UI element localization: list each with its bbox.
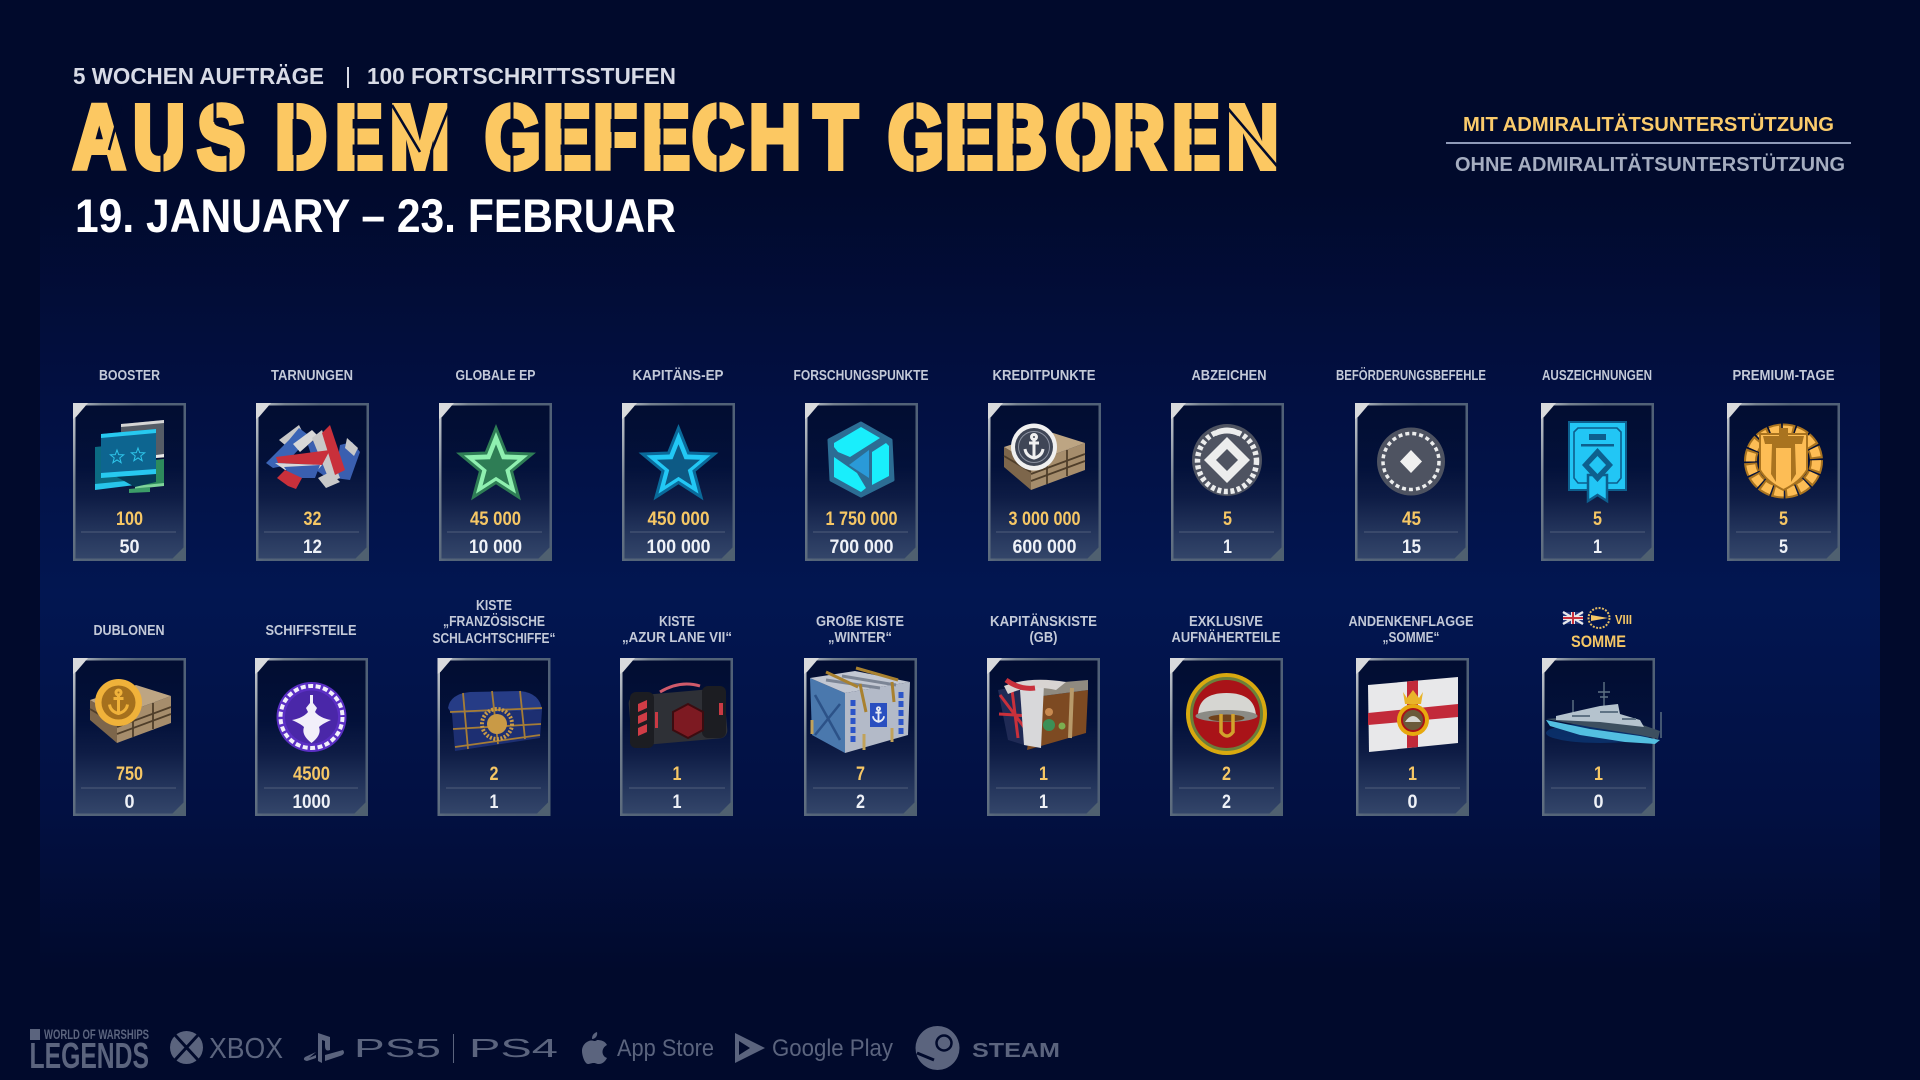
card: Große Kiste Winter: 2 xyxy=(856,792,865,813)
card: Kapitänskiste GB: 1 xyxy=(1039,792,1048,813)
icon: camouflage xyxy=(266,425,360,489)
icon: doubloons crate and coin xyxy=(90,679,171,743)
card: Exklusive Aufnäherteile: 2 xyxy=(1222,792,1231,813)
card: Booster xyxy=(73,368,186,561)
card: Premium-Tage: 5 xyxy=(1779,509,1788,530)
card: Kreditpunkte: KREDITPUNKTE xyxy=(992,368,1096,384)
logo: Steam: STEAM xyxy=(972,1040,1060,1062)
card: Somme ship: 0 xyxy=(1594,792,1604,813)
card: Beförderungsbefehle xyxy=(1336,367,1486,561)
icon: UK flag xyxy=(1563,612,1583,624)
card: Booster: BOOSTER xyxy=(99,368,160,384)
card: Kapitänskiste GB: KAPITÄNSKISTE xyxy=(990,613,1097,630)
card: Beförderungsbefehle: 45 xyxy=(1402,509,1421,530)
card: Kiste Azur Lane VII: KISTE xyxy=(659,614,695,630)
card: Andenkenflagge Somme xyxy=(1348,614,1474,816)
card: Abzeichen: ABZEICHEN xyxy=(1192,368,1266,384)
header: quests and stages: 5 WOCHEN AUFTRÄGE xyxy=(73,63,324,89)
card: Forschungspunkte xyxy=(794,368,929,561)
card: Kapitänskiste GB: (GB) xyxy=(1030,630,1058,646)
icon: patch xyxy=(1186,673,1267,755)
legend: MIT ADMIRALITÄTSUNTERSTÜTZUNG xyxy=(1463,113,1834,136)
card: Beförderungsbefehle: BEFÖRDERUNGSBEFEHLE xyxy=(1336,367,1486,384)
logo: World of Warships Legends: LEGENDS xyxy=(30,1035,149,1076)
card: Kreditpunkte: 3 000 000 xyxy=(1008,509,1080,530)
card: Kiste Französische Schlachtschiffe: „FRANZÖSISCHE xyxy=(443,613,545,630)
date range: 19. JANUARY – 23. FEBRUAR xyxy=(75,189,676,242)
title: AUS DEM GEFECHT GEBOREN xyxy=(73,87,1279,188)
icon: rank emblem xyxy=(1588,608,1610,628)
icon: premium laurel shield xyxy=(1750,428,1816,492)
legend xyxy=(1446,113,1851,176)
card: Dublonen: DUBLONEN xyxy=(94,623,164,639)
card: Somme ship: 1 xyxy=(1594,764,1603,785)
logo: Xbox: XBOX xyxy=(209,1033,283,1065)
card: Dublonen: 750 xyxy=(116,764,143,785)
icon: credits crate and coin xyxy=(1004,424,1085,490)
logo: Xbox xyxy=(170,1031,283,1065)
card: Tarnungen: TARNUNGEN xyxy=(271,368,353,384)
card: Beförderungsbefehle: 15 xyxy=(1402,537,1421,558)
logo: World of Warships Legends: WORLD OF WARSHIPS xyxy=(44,1027,149,1042)
card: Tarnungen: 12 xyxy=(303,537,322,558)
card: Andenkenflagge Somme: ANDENKENFLAGGE xyxy=(1348,614,1474,630)
card: Abzeichen: 5 xyxy=(1223,509,1232,530)
card: Auszeichnungen: 5 xyxy=(1593,509,1602,530)
card: Kiste Französische Schlachtschiffe: SCHLACHTSCHIFFE“ xyxy=(432,631,556,647)
card: Forschungspunkte: 1 750 000 xyxy=(826,509,898,530)
logo: World of Warships Legends xyxy=(30,1027,149,1076)
icon: green star xyxy=(460,428,532,497)
card: Booster: 50 xyxy=(120,537,140,558)
card: Andenkenflagge Somme: „SOMME“ xyxy=(1382,630,1440,646)
card: Kapitäns-EP: 450 000 xyxy=(648,509,710,530)
card: Globale EP: 45 000 xyxy=(470,509,521,530)
card: Kapitäns-EP: KAPITÄNS-EP xyxy=(632,367,724,384)
card: Kapitäns-EP: 100 000 xyxy=(646,537,710,558)
legend: OHNE ADMIRALITÄTSUNTERSTÜTZUNG xyxy=(1455,153,1845,176)
footer: platform logos xyxy=(30,1026,1060,1076)
card: Kapitänskiste GB: 1 xyxy=(1039,764,1048,785)
card: Kiste Azur Lane VII: 1 xyxy=(672,764,682,785)
logo: App Store xyxy=(582,1032,714,1064)
icon: commendation xyxy=(1569,422,1626,501)
icon: research hexagon xyxy=(829,423,893,496)
card: Somme ship: SOMME xyxy=(1571,632,1626,651)
card: Kiste Französische Schlachtschiffe: KISTE xyxy=(476,598,512,614)
icon: blue star xyxy=(642,428,714,497)
card: Schiffsteile: 4500 xyxy=(293,764,330,785)
card: Kiste Azur Lane VII: „AZUR LANE VII“ xyxy=(622,630,732,646)
card: Tarnungen xyxy=(256,368,369,561)
logo: PlayStation 5 and 4 xyxy=(304,1033,558,1063)
icon: azur lane crate xyxy=(628,684,728,748)
card: Globale EP: GLOBALE EP xyxy=(456,368,536,384)
card: Große Kiste Winter: GROßE KISTE xyxy=(816,614,904,630)
card: Dublonen xyxy=(73,623,186,816)
card: Somme ship xyxy=(1542,608,1661,816)
logo: Google Play: Google Play xyxy=(772,1035,893,1062)
icon: ship xyxy=(1546,682,1661,744)
logo: Steam xyxy=(916,1026,1060,1070)
card: Kapitäns-EP xyxy=(622,367,735,561)
card: Kreditpunkte xyxy=(988,368,1101,561)
icon: booster flags xyxy=(95,420,164,493)
card: Schiffsteile xyxy=(255,623,368,816)
card: Große Kiste Winter: „WINTER“ xyxy=(828,630,892,646)
card: Premium-Tage: PREMIUM-TAGE xyxy=(1732,368,1835,384)
icon: ship parts xyxy=(276,682,346,752)
card: Kapitänskiste GB xyxy=(987,613,1100,816)
card: Große Kiste Winter: 7 xyxy=(856,764,865,785)
card: Kiste Französische Schlachtschiffe xyxy=(432,598,556,816)
card: Exklusive Aufnäherteile xyxy=(1170,614,1283,816)
card: Große Kiste Winter xyxy=(804,614,917,816)
card: Kiste Azur Lane VII: 1 xyxy=(672,792,682,813)
card: Andenkenflagge Somme: 1 xyxy=(1408,764,1417,785)
card: Schiffsteile: SCHIFFSTEILE xyxy=(266,623,357,639)
card: Globale EP: 10 000 xyxy=(469,537,522,558)
card: Auszeichnungen xyxy=(1541,368,1654,561)
card: Abzeichen: 1 xyxy=(1223,537,1232,558)
card: Forschungspunkte: FORSCHUNGSPUNKTE xyxy=(794,368,929,384)
card: Premium-Tage xyxy=(1727,368,1840,561)
card: Andenkenflagge Somme: 0 xyxy=(1408,792,1418,813)
card: Exklusive Aufnäherteile: 2 xyxy=(1222,764,1231,785)
card: Exklusive Aufnäherteile: EXKLUSIVE xyxy=(1189,614,1263,630)
icon: french battleships chest xyxy=(448,691,542,751)
card: Kiste Azur Lane VII xyxy=(620,614,733,816)
card: Dublonen: 0 xyxy=(124,792,134,813)
card: Exklusive Aufnäherteile: AUFNÄHERTEILE xyxy=(1172,629,1281,646)
icon: promotion order xyxy=(1377,428,1445,496)
icon: badge xyxy=(1192,424,1262,496)
card: Tarnungen: 32 xyxy=(304,509,322,530)
card: Kreditpunkte: 600 000 xyxy=(1012,537,1076,558)
logo: PlayStation 5 and 4: PS4 xyxy=(469,1033,558,1063)
logo: PlayStation 5 and 4: PS5 xyxy=(354,1033,441,1063)
card: Globale EP xyxy=(439,368,552,561)
card: Kiste Französische Schlachtschiffe: 2 xyxy=(490,764,498,785)
icon: captain chest xyxy=(998,680,1088,750)
icon: commemorative flag xyxy=(1368,677,1458,752)
header: quests and stages: 100 FORTSCHRITTSSTUFEN xyxy=(367,63,676,89)
card: Schiffsteile: 1000 xyxy=(292,792,330,813)
card: Auszeichnungen: 1 xyxy=(1593,537,1602,558)
card: Somme ship: VIII xyxy=(1615,612,1632,627)
icon: winter crate xyxy=(810,668,910,753)
card: Abzeichen xyxy=(1171,368,1284,561)
card: Auszeichnungen: AUSZEICHNUNGEN xyxy=(1542,368,1652,384)
card: Premium-Tage: 5 xyxy=(1779,537,1788,558)
logo: Google Play xyxy=(735,1033,893,1063)
logo: App Store: App Store xyxy=(617,1035,714,1062)
card: Forschungspunkte: 700 000 xyxy=(830,537,894,558)
card: Kiste Französische Schlachtschiffe: 1 xyxy=(490,792,499,813)
card: Booster: 100 xyxy=(116,509,143,530)
header: quests and stages xyxy=(73,63,676,89)
